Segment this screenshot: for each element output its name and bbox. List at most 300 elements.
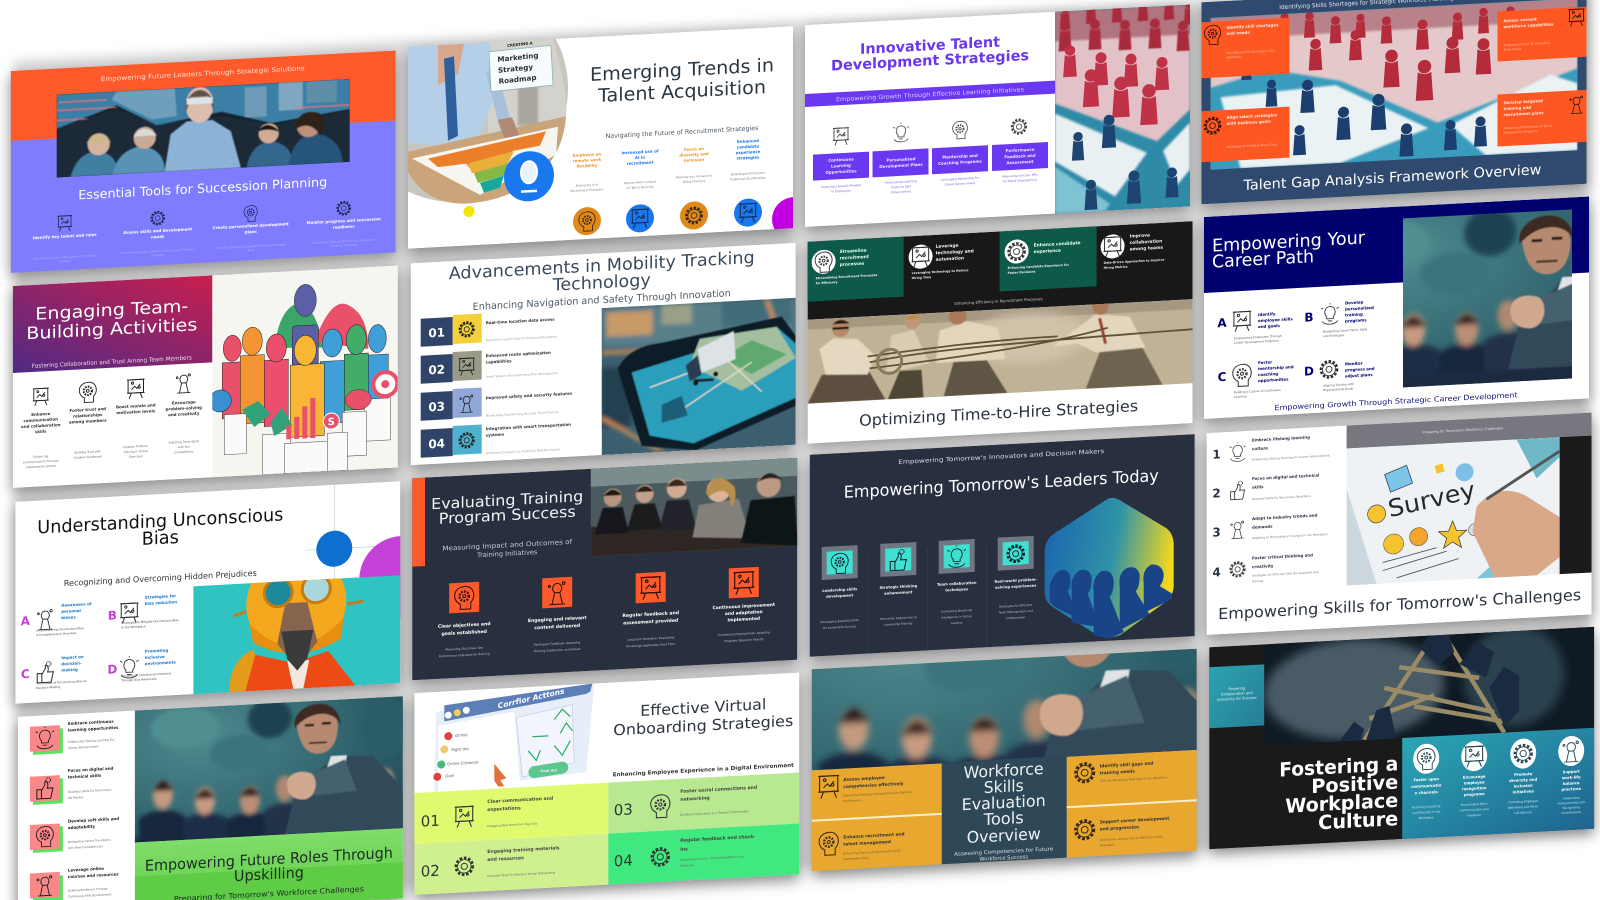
quadrant 02: 02 (421, 862, 440, 881)
title panel (135, 828, 403, 900)
item A: Career Development Programs (1234, 338, 1279, 345)
callout: identify shortages: Identifying Skills Shortages in the (1226, 48, 1275, 55)
column: open communication: Fostering Inclusivity (1412, 804, 1441, 810)
column: morale (116, 379, 156, 460)
item 2: Focus on digital and technical (1252, 472, 1320, 481)
tagline panel: Inclusivity for Success (1217, 696, 1257, 702)
column: remote work: Embracing AI in (576, 183, 599, 188)
illustration: corrective actions checklist: Online Corrector (447, 760, 479, 766)
column: trust: Building Trust with (74, 449, 101, 455)
photo: pointing man (812, 648, 1197, 770)
column: open communication: n channels (1415, 789, 1438, 795)
column: work-life balance: Support (1563, 769, 1580, 774)
item A (1217, 309, 1293, 346)
illustration: corrective actions checklist: Online (455, 732, 468, 738)
item: career development (1076, 816, 1169, 849)
column: team collaboration: Intelligence in Future (941, 614, 972, 620)
column: mentorship: Career Advancement (945, 181, 976, 187)
quadrant 03: 03 (614, 800, 633, 819)
panel: candidate experience: Enhance candidate (1034, 240, 1081, 249)
column: use of AI: Remote Work's Impact (624, 179, 657, 185)
item C: making (61, 667, 78, 673)
item: soft skills (30, 816, 119, 853)
subtitle: Recognizing and Overcoming Hidden Prejudices (64, 568, 257, 588)
row 03: 03 (428, 399, 445, 414)
panel: collaboration: Data-Driven Approaches to Improve (1104, 258, 1164, 265)
item: soft skills: Develop soft skills and (68, 816, 119, 824)
column: real-world problem solving: Team Management and (998, 609, 1033, 615)
item: career development: Evaluation (1100, 843, 1115, 847)
panel: collaboration: Improve (1130, 232, 1150, 240)
photo: strategy roadmap (352, 0, 568, 210)
item D: Creating an Inclusive Environment (121, 671, 172, 678)
slide 3: Innovative Talent Development Strategies (805, 0, 1194, 227)
column: communication: communication (24, 416, 58, 423)
subtitle band: Empowering Growth Through Effective Learning Initiatives (836, 87, 1024, 103)
column: performance feedback: Assessment (1007, 159, 1034, 165)
item D: Organizational Goals (1323, 387, 1354, 392)
column: team collaboration: Cultivating Emotional (941, 608, 972, 614)
column: recognition: Communication and (1460, 807, 1489, 812)
column: assess skills: needs (151, 234, 165, 240)
callout: develop targeted: training and (1504, 105, 1531, 111)
item D: Aligning Training with (1323, 382, 1354, 388)
title: Program Success (439, 503, 576, 528)
slide 2: Emerging Trends in Talent Acquisition (352, 0, 814, 263)
subtitle: Training Initiatives (476, 548, 538, 559)
item B: B (1304, 310, 1314, 325)
illustration: corrective actions checklist: Goal Act (540, 768, 558, 773)
column: continuous improvement (713, 566, 775, 644)
column: work-life balance: Contributions (1561, 810, 1581, 815)
item 4: Foster critical thinking and (1252, 552, 1313, 561)
column: problem solving: Fostering Team Spirit (169, 439, 200, 445)
item: online courses: Leverage online (68, 866, 104, 873)
item 1: culture (1252, 445, 1268, 451)
item: assess employee: Assess employee (843, 775, 885, 783)
column: engaging: content delivered (534, 623, 580, 631)
column: communication: Enhance (31, 411, 51, 417)
photo: pointing man (134, 696, 403, 842)
item 2: 2 (1212, 486, 1221, 501)
item: enhance recruitment (819, 828, 905, 862)
item: career development: and progression (1100, 824, 1139, 832)
title: Bias (142, 527, 179, 550)
quadrant 02: and resources (487, 855, 524, 863)
row 02 (421, 346, 559, 384)
panel: leverage technology: technology and (936, 248, 974, 256)
tagline panel: Collaboration and (1221, 691, 1253, 697)
column: recognition: Feedback (1467, 813, 1481, 818)
item A: A Comprehensive Overview (36, 631, 77, 637)
column: continuous learning (813, 127, 869, 195)
decorative cross lines and circles (305, 479, 441, 623)
column: regular feedback: Long-term Retention: Evaluating (627, 635, 674, 642)
panel: streamline: recruitment (840, 254, 869, 261)
column: problem solving: problem-solving (166, 405, 202, 412)
title: Emerging Trends in (590, 55, 774, 86)
item A: Understanding Unconscious Bias: (36, 626, 85, 633)
item 3: demands (1252, 524, 1273, 530)
quadrant 03: Foster social connections and (680, 785, 757, 795)
column: open communication: Foster open (1413, 776, 1439, 782)
item B: personalized (1345, 305, 1374, 311)
slide 1: Essential Tools for Succession Planning (11, 50, 396, 273)
title: Effective Virtual (640, 695, 766, 720)
column: use of AI: on Talent Sourcing (627, 185, 653, 190)
quadrant 01: Clear communication and (487, 796, 553, 805)
item D: progress and (1345, 366, 1375, 372)
item C: mentorship and (1258, 364, 1294, 371)
column: open communication: Workplace (1419, 815, 1434, 820)
column: candidate experience: Traditional Qualifications (729, 176, 766, 182)
callout: align talent: Strategies for Bridging Talent Gaps (1226, 142, 1277, 149)
item A: A (21, 614, 31, 628)
item: soft skills: Navigating Career Transitions (68, 838, 111, 844)
column: leadership skills: Developing Essential Skills (820, 618, 859, 624)
item 1: Embracing Lifelong Learning for Career Advancement (1252, 453, 1331, 462)
photo: red and blue pegs (1055, 4, 1190, 214)
column: performance feedback: Feedback and (1004, 153, 1036, 159)
column: development plans: Create personalized development (213, 221, 289, 230)
column: communication: skills (35, 429, 47, 434)
row 03: Mobile Apps Transforming Personal Travel Tracking (486, 410, 559, 418)
title: Talent Acquisition (597, 77, 766, 107)
item C: Learning (1234, 394, 1247, 399)
illustration: corrective actions checklist (433, 683, 594, 792)
panel: leverage technology: automation (936, 255, 964, 263)
right panel (1402, 728, 1594, 839)
column: real-world problem solving: Real-world problem- (995, 578, 1037, 584)
item B: Develop (1345, 300, 1363, 305)
slide 9: Understanding Unconscious Bias (15, 479, 441, 704)
slide 12: Empowering Skills for Tomorrow's Challenges (1207, 412, 1592, 635)
column: recognition: Encouraging Open (1461, 801, 1488, 807)
item A: biases (61, 614, 76, 620)
item B: programs (1345, 317, 1367, 323)
item 1: 1 (1212, 447, 1221, 462)
panel: streamline (808, 237, 904, 302)
slide 6: Advancements in Mobility Tracking Technology (411, 243, 796, 465)
panel: leverage technology: Leveraging Technology to Reduce (912, 268, 969, 275)
item: identify gaps: training needs (1100, 769, 1135, 776)
title: Culture (1318, 807, 1398, 834)
column: strategic thinking: Strategic thinking (880, 584, 917, 590)
column: open communication: and Diversity in the (1412, 809, 1441, 815)
icon: blue globe circle (504, 150, 554, 203)
column: diversity: inclusion (1514, 783, 1533, 789)
title: Essential Tools for Succession Planning (78, 174, 327, 202)
column: trust: relationships (73, 412, 103, 419)
row 02: Smart Sensors Revolutionizing Fleet Management (486, 371, 559, 379)
item D: Monitor (1345, 361, 1363, 366)
column: objectives: goals established (441, 629, 487, 637)
item: digital skills: Job Market (67, 795, 84, 800)
item B: Navigating Career Paths: Skills (1323, 327, 1368, 334)
column: team collaboration: Leaders (951, 621, 963, 625)
column: work-life balance (1558, 735, 1585, 815)
dark side strip (1560, 435, 1592, 574)
photo: red and blue pegs (1210, 0, 1578, 170)
column: assess skills: Essential Features of Effective Succession Planning (121, 247, 195, 255)
column: diversity: Focus on (684, 146, 704, 152)
callout: develop targeted: Develop targeted (1504, 98, 1543, 105)
item C: Impact on (61, 654, 84, 660)
item 4: Training (1251, 579, 1264, 584)
item: identify gaps: Identify skill gaps and (1100, 761, 1153, 769)
item A: Identify (1258, 311, 1276, 317)
column: identify talent: Identify key talent and roles (33, 232, 97, 240)
subtitle: Enhancing Navigation and Safety Through Innovation (473, 288, 731, 313)
column: problem solving: with Fun (178, 445, 190, 449)
item B (108, 593, 179, 630)
column: strategic thinking: Leadership Training (884, 621, 913, 627)
row 04: AI-Powered Analytics for Predictive Mobility Insights (486, 447, 561, 455)
column: monitor progress: readiness (333, 224, 355, 230)
item: identify gaps (1076, 759, 1168, 784)
item: continuous learning (30, 718, 119, 755)
item: digital skills: technical skills (68, 773, 102, 780)
column: objectives: Performance Indicators for Training (439, 652, 490, 658)
column: leadership skills (820, 545, 859, 630)
column: open communication (1411, 743, 1442, 821)
title: Talent Gap Analysis Framework Overview (1242, 162, 1541, 194)
callout: develop targeted (1498, 90, 1586, 147)
item 2 (1212, 472, 1320, 503)
quadrant 02: Engaging training materials (487, 845, 560, 855)
footer subtitle: Empowering Growth Through Strategic Career Development (1274, 390, 1518, 412)
column: personalized plans: Personalized (887, 156, 916, 163)
item D: D (107, 662, 117, 677)
panel: candidate experience: experience (1034, 248, 1061, 255)
decorative yellow dot (464, 206, 474, 217)
subtitle: Enhancing Efficiency in Recruitment Processes (954, 296, 1043, 306)
item: continuous learning: Embracing Lifelong Learning for (68, 738, 115, 744)
column: problem solving: and creativity (168, 411, 200, 417)
title: Fostering a (1279, 752, 1398, 782)
item C: Decision-Making (36, 685, 60, 690)
slide 8: Empowering Your Career Path (1204, 130, 1600, 466)
column: work-life balance: balance (1563, 780, 1580, 786)
column: candidate experience: experience (736, 149, 761, 155)
column: work-life balance: practices (1561, 786, 1582, 792)
item D: Through Bias Awareness (120, 677, 157, 683)
item C (21, 654, 87, 691)
quadrant 03 (608, 772, 799, 834)
column: diversity: initiatives (1512, 788, 1535, 795)
callout: identify shortages: Workforce (1226, 55, 1241, 59)
column: morale: Solving in Group (124, 449, 148, 454)
row 03: Improved safety and security features (486, 391, 573, 400)
subtitle: Enhancing Employee Experience in a Digital Environment (613, 763, 794, 778)
column: candidate experience (729, 138, 766, 228)
photo: pointing man (1403, 209, 1572, 388)
column: continuous learning: Continuous (828, 156, 854, 163)
photo: phone with truck map (602, 298, 796, 455)
column: team collaboration: Team collaboration (937, 581, 977, 587)
column: mentorship: Coaching Programs (938, 159, 983, 166)
column: trust: among members (69, 418, 107, 425)
center title panel: Workforce Success (979, 854, 1028, 863)
column: identify talent: Leaders (59, 259, 71, 263)
item D (107, 647, 177, 683)
quadrant 04: 04 (614, 851, 633, 870)
column: identify talent: Streamlining Talent Management for Future (33, 253, 96, 261)
column: candidate experience: Enhanced (737, 138, 759, 144)
column: real-world problem solving: Collaboration (1006, 615, 1025, 620)
title: Development Strategies (831, 48, 1029, 75)
item C (1218, 358, 1294, 400)
item C: decision- (61, 660, 82, 666)
item: online courses (30, 865, 119, 900)
quadrant 04: Feedback (680, 863, 694, 868)
illustration: gradient hexagon with silhouettes (1045, 495, 1174, 642)
item 1: Embrace lifelong learning (1252, 434, 1310, 443)
callout: align talent: with business goals (1226, 119, 1272, 126)
tagline panel (1209, 664, 1264, 728)
photo: orange mask figure (193, 575, 400, 694)
column: strategic thinking (880, 542, 917, 627)
column: recognition: employee (1464, 779, 1485, 786)
item A: and goals (1258, 323, 1280, 329)
title: Workplace (1285, 789, 1398, 818)
column: diversity: Life Balance (1514, 810, 1532, 815)
column: remote work: Recruitment Processes (571, 187, 604, 193)
callout: assess workforce (1498, 7, 1586, 62)
column: assess skills: Assess skills and development (123, 226, 192, 235)
quadrant 01: expectations (487, 805, 521, 813)
item A: Awareness of (61, 601, 92, 608)
column: recognition: programs (1464, 791, 1485, 797)
slide 5: Engaging Team-Building Activities (13, 265, 398, 488)
center title panel: Overview (967, 824, 1041, 847)
item: assess employee: competencies effectively (843, 781, 904, 790)
column: trust: Outdoor Challenges (73, 454, 103, 460)
column: continuous improvement: Continuous Improvement: Adapting (718, 630, 770, 637)
column: personalized plans: Paths for Skill (891, 184, 911, 189)
column: team collaboration: techniques (945, 587, 969, 592)
header band (1347, 412, 1592, 449)
subtitle: Empowering Future Leaders Through Strategic Solutions (101, 64, 305, 83)
column: monitor progress: Planning Solutions (330, 243, 358, 248)
column: engaging: Engaging and relevant (528, 615, 587, 624)
item: career development: Support career development (1100, 816, 1169, 825)
callout: assess workforce: Analyzing Current Technological (1504, 41, 1550, 47)
item C: coaching (1258, 371, 1278, 377)
item: assess employee (818, 772, 912, 804)
item 4: Strategies for Effective Skill Development and (1252, 570, 1319, 578)
column: leadership skills: for Leadership Success (823, 624, 857, 630)
title: Innovative Talent (860, 35, 1000, 58)
item B: bias reduction (145, 599, 177, 606)
item 1 (1212, 433, 1331, 464)
center title panel: Tools (983, 808, 1024, 829)
callout: identify shortages: and needs (1226, 30, 1250, 36)
photo: strategy roadmap: Strategy (498, 62, 534, 75)
decorative magenta circle (772, 196, 814, 240)
column: remote work (571, 151, 604, 236)
quadrant 01: Engaging New Hires from Day One (487, 821, 538, 828)
title: Technology (552, 271, 651, 296)
column: diversity: Hiring Practices (683, 179, 706, 184)
column: diversity (1508, 738, 1539, 815)
column: strategic thinking: enhancement (884, 590, 913, 596)
column: trust: Foster trust and (70, 406, 106, 413)
item B: in the Workplace (121, 624, 146, 630)
column: work-life balance: Recognizing (1562, 805, 1580, 810)
column: recognition (1460, 740, 1489, 818)
row 04: systems (486, 432, 505, 438)
column: engaging: Participant Feedback: Assessing (534, 640, 580, 647)
item B: Strategies for (145, 593, 176, 600)
column: use of AI: Increased use of (621, 148, 659, 155)
column: work-life balance: Achievements and (1558, 800, 1585, 806)
slide 16: Fostering a Positive Workplace Culture (1209, 622, 1594, 849)
item C: C (21, 667, 30, 681)
item: assess employee: Assessing Employee Competencies for Optimal (843, 790, 912, 798)
column: diversity: Diversity and Inclusion in (676, 173, 712, 179)
item D: Promoting (145, 648, 168, 654)
item D: adjust plans (1345, 372, 1373, 378)
panel: leverage technology: Hiring Time (912, 275, 931, 280)
title: Advancements in Mobility Tracking (449, 248, 755, 284)
divider strips (812, 800, 1197, 821)
column: candidate experience: candidate (737, 143, 759, 150)
photo: survey form (1346, 437, 1560, 586)
item: digital skills: Focus on digital and (68, 766, 114, 773)
column: communication: and collaboration (21, 422, 61, 429)
column: monitor progress (306, 200, 381, 249)
quadrant 03: Building Connections in a Remote Environment (680, 809, 749, 817)
item 3: 3 (1212, 525, 1221, 540)
item: enhance recruitment: talent management (843, 839, 891, 848)
item: soft skills: with New Competencies (68, 844, 103, 850)
item C: Building a Culture of Continuous (1234, 388, 1281, 394)
subtitle: Measuring Impact and Outcomes of (442, 538, 573, 553)
column: diversity: diversity and (679, 151, 709, 158)
column: problem solving: Competitions (174, 449, 194, 454)
column: work-life balance: work-life (1562, 774, 1581, 780)
item B (1304, 299, 1374, 339)
column: performance feedback: Measuring Success: KPIs (1002, 173, 1038, 178)
item: continuous learning: Career Advancement (68, 744, 99, 750)
column: objectives: Clear objectives and (438, 621, 491, 630)
item 4 (1212, 552, 1319, 586)
column: mentorship: Leveraging Mentorship for (941, 176, 980, 182)
photo: strategy roadmap: Roadmap (498, 73, 537, 86)
item: soft skills: adaptability (68, 824, 96, 830)
item D (1304, 359, 1375, 393)
item: identify gaps: Tools for Measuring Skill Gaps in the Workforce (1099, 775, 1168, 783)
column: regular feedback: Knowledge Application Over Time (626, 642, 675, 648)
item B: B (108, 608, 117, 623)
item 2: Essential Skills for Tomorrow's Workforce (1252, 494, 1311, 501)
accent strip (412, 478, 425, 567)
row 02: capabilities (486, 358, 512, 365)
column: problem solving (166, 373, 202, 455)
column: development plans (213, 204, 289, 254)
item: online courses: Building Resilience Through (68, 886, 108, 893)
callout: assess workforce: Trend Needs (1503, 47, 1522, 52)
item: career development: Data-Driven Approaches to Workforce Skills (1100, 835, 1163, 842)
item D: inclusive (145, 654, 165, 660)
panel: streamline: processes (840, 261, 865, 268)
column: objectives (438, 581, 491, 658)
column: work-life balance: Celebrating (1563, 796, 1580, 800)
slide 4: Talent Gap Analysis Framework Overview (1202, 0, 1586, 204)
callout: align talent: Align talent strategies (1226, 112, 1278, 120)
column: regular feedback: Regular feedback and (622, 610, 679, 619)
